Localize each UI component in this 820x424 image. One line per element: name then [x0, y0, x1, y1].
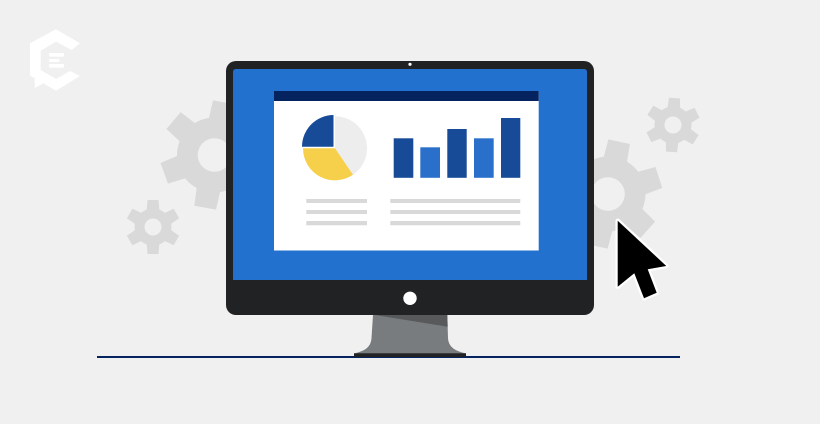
camera dot [408, 63, 412, 66]
icon: large left gear [154, 93, 275, 217]
monitor stand [354, 315, 466, 357]
power button [403, 292, 417, 305]
icon: mouse cursor [618, 221, 666, 298]
pie chart [302, 115, 367, 180]
logo [30, 29, 80, 91]
ground line [97, 356, 680, 358]
icon: small right gear [645, 97, 701, 153]
window title bar [274, 91, 539, 101]
text placeholder lines: left [306, 199, 367, 225]
monitor screen [233, 69, 587, 280]
bar chart [394, 118, 520, 178]
icon: large right gear [546, 131, 670, 257]
text placeholder lines: right [390, 199, 520, 225]
monitor [226, 61, 594, 315]
icon: small left gear [126, 200, 180, 254]
panel: dashboard window [274, 91, 539, 250]
